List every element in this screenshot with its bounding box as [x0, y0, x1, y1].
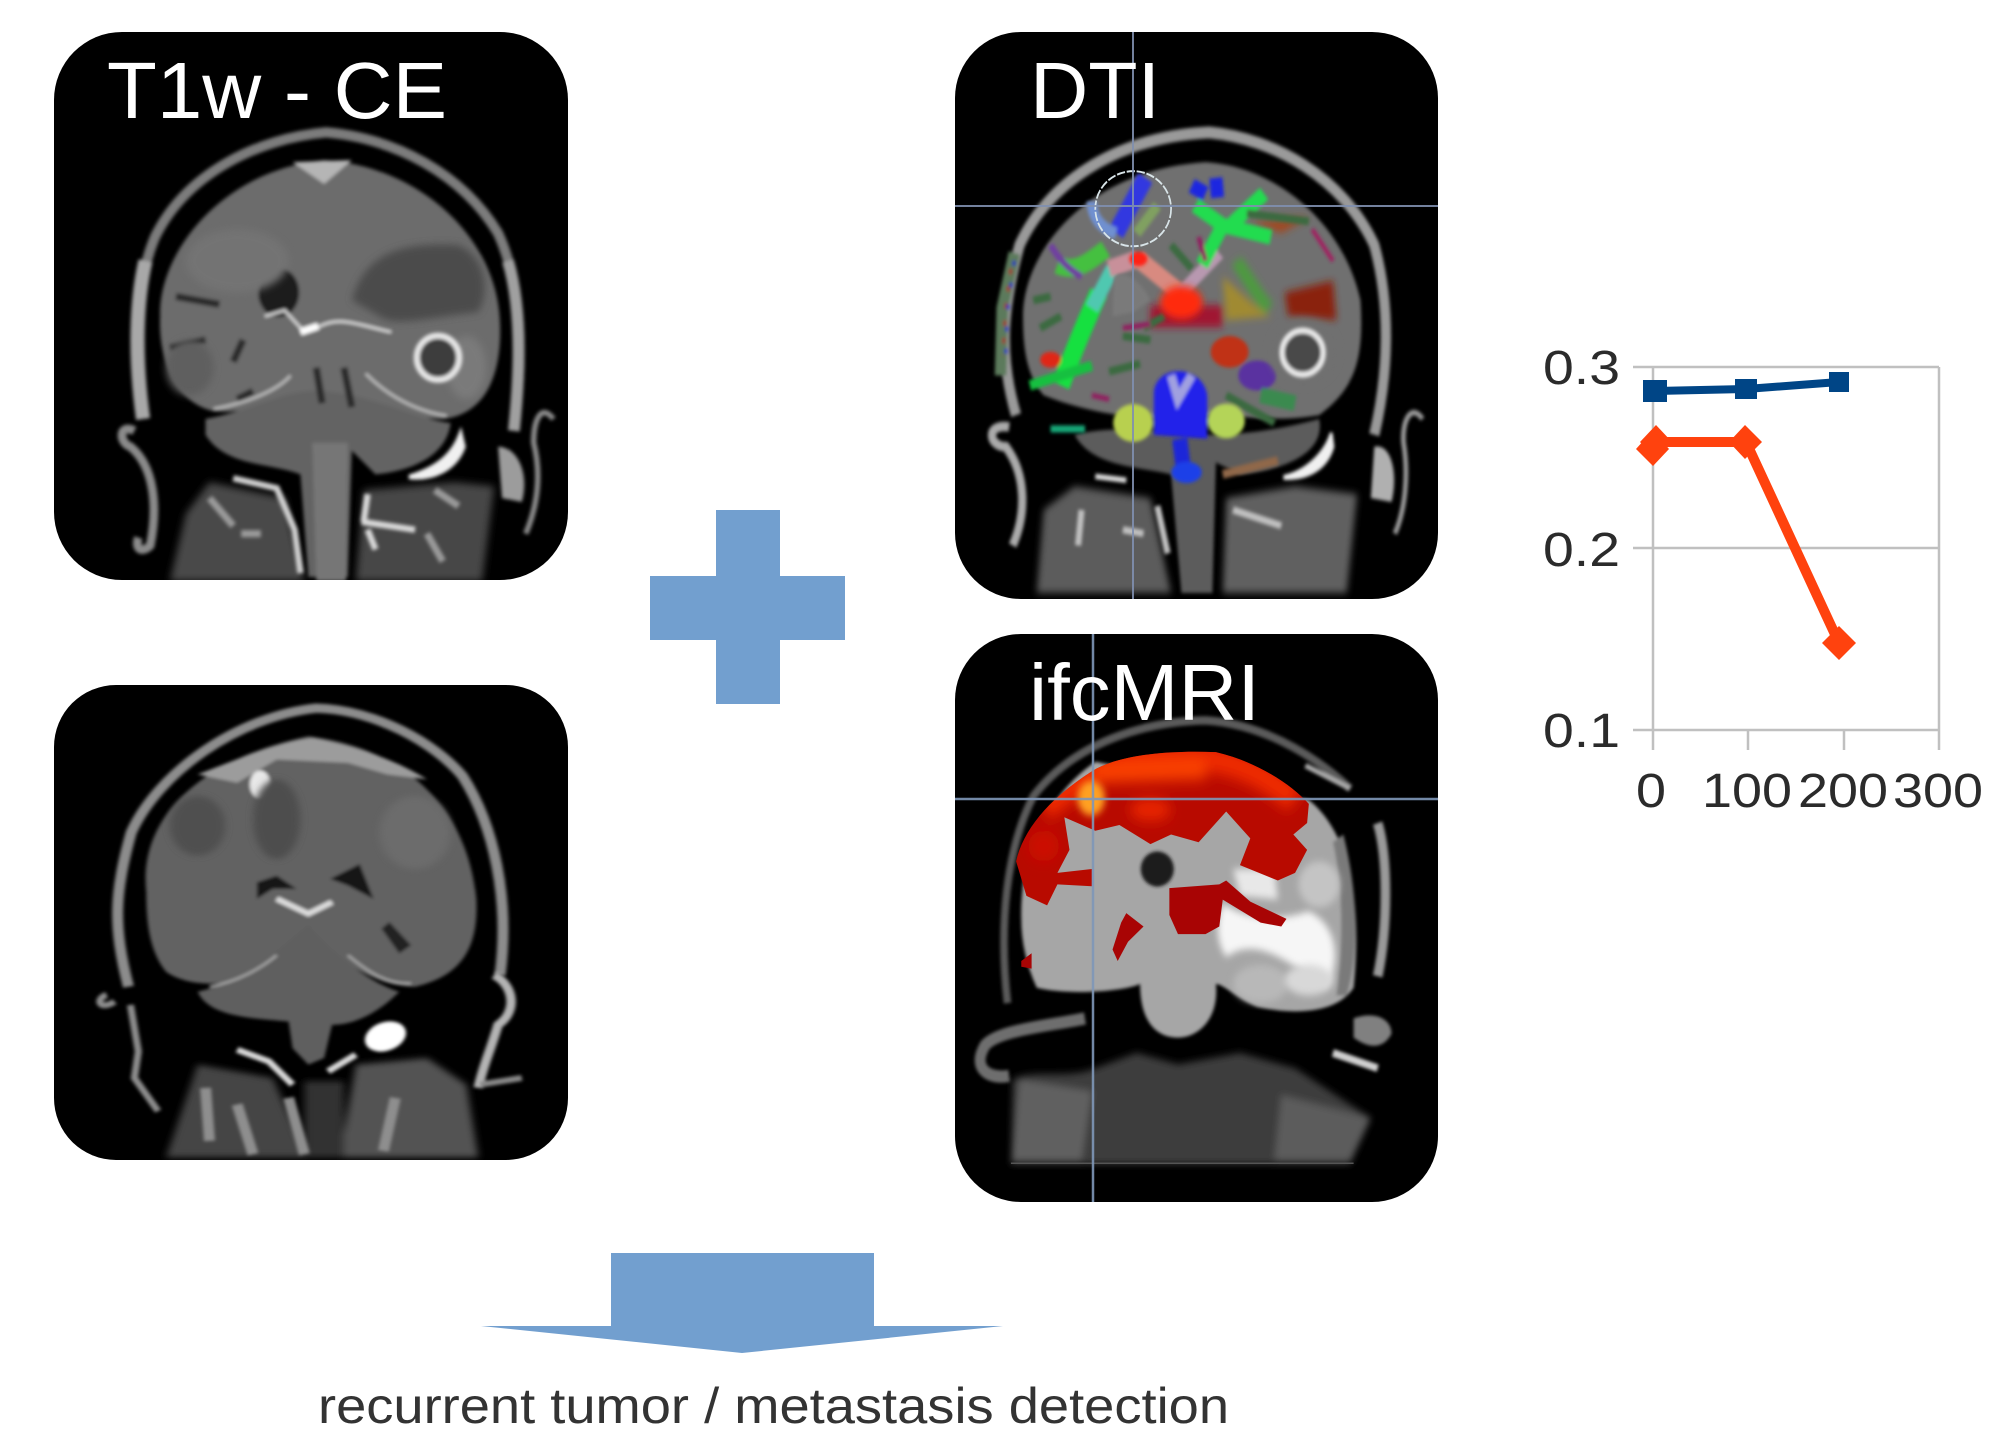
brain scan: DTI overlay — [992, 132, 1422, 593]
brain scan: second coronal slice — [100, 708, 522, 1158]
caption: recurrent tumor / metastasis detection — [318, 1378, 1229, 1434]
panel: DTI tractography — [955, 32, 1438, 599]
panel: ifcMRI activation map — [955, 634, 1438, 1202]
y-axis labels: 0.3 — [1543, 342, 1620, 395]
tumor ring — [417, 336, 459, 380]
arrow: down — [481, 1253, 1003, 1353]
label: DTI: DTI — [1030, 46, 1160, 135]
brain scan: T1w coronal slice — [122, 132, 553, 581]
series: orange line — [1636, 425, 1856, 660]
brain scan: ifcMRI overlay — [980, 720, 1391, 1164]
dashed region circle — [1095, 171, 1171, 246]
grid and axes — [1633, 367, 1939, 750]
x-axis labels: 300 — [1893, 765, 1983, 818]
y-axis labels: 0.2 — [1543, 524, 1620, 577]
icon: plus sign — [650, 510, 845, 704]
crosshair — [955, 32, 1438, 599]
line chart — [1543, 342, 1983, 818]
panel: T1w contrast-enhanced MRI — [54, 32, 568, 581]
ventricle — [1141, 851, 1174, 887]
x-axis labels: 200 — [1798, 765, 1888, 818]
y-axis labels: 0.1 — [1543, 705, 1620, 758]
y-axis labels — [1543, 342, 1620, 758]
activation: cortical band — [1016, 752, 1309, 905]
x-axis labels: 0 — [1636, 765, 1666, 818]
crosshair — [955, 634, 1438, 1202]
x-axis labels — [1636, 765, 1983, 818]
activation: deep clusters — [1021, 881, 1286, 969]
series: blue line — [1643, 372, 1849, 402]
tumor ring — [1282, 330, 1323, 375]
panel: follow-up T1w MRI — [54, 685, 568, 1160]
label: ifcMRI: ifcMRI — [1029, 648, 1260, 737]
label: T1w - CE: T1w - CE — [107, 46, 447, 135]
x-axis labels: 100 — [1702, 765, 1792, 818]
